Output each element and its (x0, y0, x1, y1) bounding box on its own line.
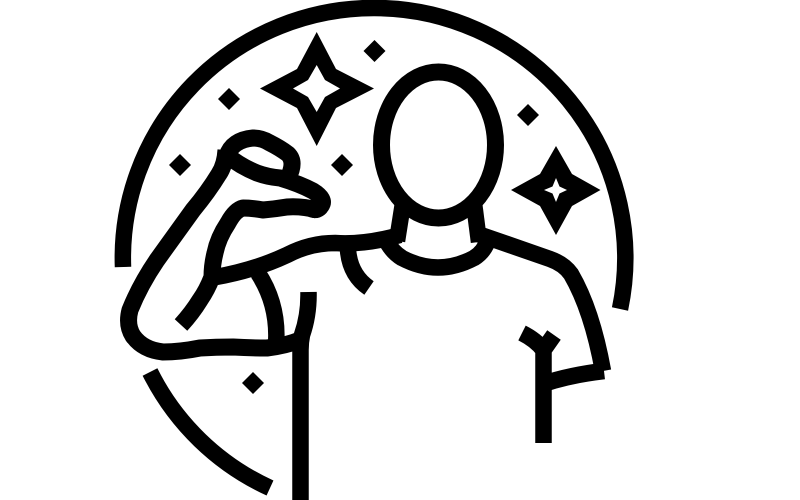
right shoulder and sleeve (478, 234, 603, 371)
neck (397, 203, 479, 242)
circular background arc: upper (123, 8, 625, 309)
sleeve hem (543, 371, 604, 384)
icon: large sparkle star (260, 32, 374, 146)
sparkle diamonds (169, 40, 539, 394)
forearm inner contour (181, 207, 317, 325)
left collar piece (348, 250, 369, 288)
fist (227, 138, 322, 210)
torso left side (300, 292, 309, 500)
left sleeve (258, 273, 276, 345)
right armpit line (522, 333, 554, 443)
raised arm outer contour (129, 150, 300, 352)
head (382, 72, 496, 218)
circular background arc: lower left (150, 372, 270, 488)
icon: small sparkle star (511, 146, 600, 235)
shirt collar (386, 240, 488, 268)
left shoulder line (216, 235, 400, 277)
